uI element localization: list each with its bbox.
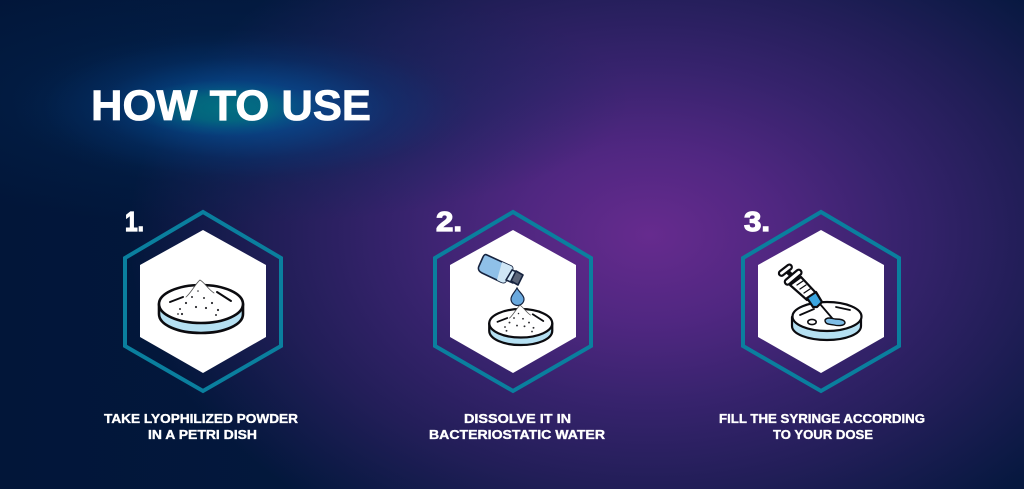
- step 3: [743, 206, 899, 391]
- step 2: [435, 206, 591, 391]
- title: HOW TO USE: [91, 82, 371, 130]
- step number 1: 1.: [125, 206, 144, 237]
- step number 2: 2.: [436, 206, 462, 237]
- caption 2: DISSOLVE IT IN: [464, 412, 571, 426]
- caption 3: TO YOUR DOSE: [773, 428, 873, 442]
- icon: water drop: [511, 288, 524, 306]
- icon: bottle pouring: [478, 255, 523, 285]
- white hexagon 2: [450, 230, 576, 373]
- step number 3: 3.: [744, 206, 770, 237]
- hexagon frame 3: [743, 212, 899, 391]
- caption 3: [719, 412, 925, 442]
- powder specks 1: [177, 290, 219, 316]
- icon: petri dish with powder: [159, 280, 243, 333]
- caption 2: BACTERIOSTATIC WATER: [429, 428, 605, 442]
- icon: syringe: [778, 264, 832, 318]
- caption 2: [429, 412, 605, 442]
- caption 1: TAKE LYOPHILIZED POWDER: [104, 412, 298, 426]
- caption 1: IN A PETRI DISH: [148, 428, 257, 442]
- step 1: [125, 206, 281, 391]
- white hexagon 1: [140, 230, 266, 373]
- hexagon frame 1: [125, 212, 281, 391]
- hexagon frame 2: [435, 212, 591, 391]
- white hexagon 3: [758, 230, 884, 373]
- caption 1: [104, 412, 298, 442]
- caption 3: FILL THE SYRINGE ACCORDING: [719, 412, 925, 426]
- icon: petri dish with liquid: [792, 302, 862, 340]
- icon: petri dish with powder 2: [489, 305, 552, 345]
